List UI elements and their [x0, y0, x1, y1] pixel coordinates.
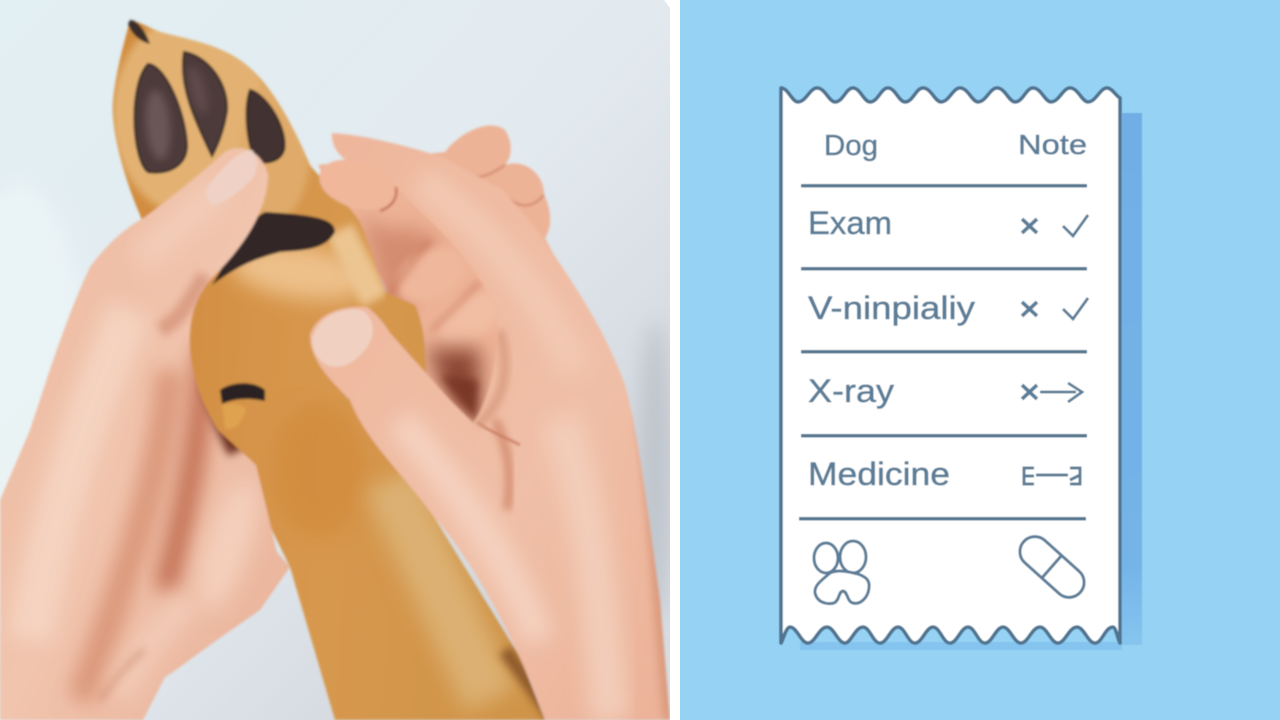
toe pad: middle [183, 52, 227, 156]
panel: blue background [680, 0, 1280, 720]
dog leg and paw [112, 15, 555, 720]
row: x-ray [808, 373, 1082, 409]
row: exam: Exam [808, 205, 892, 241]
row: medicine [808, 456, 1080, 492]
icon: pill [1014, 530, 1090, 604]
claw [128, 20, 150, 44]
column headers: Dog [824, 130, 878, 162]
row: exam [808, 205, 1088, 241]
toe pad: right [247, 90, 285, 162]
receipt [781, 88, 1120, 643]
row: x-ray: X-ray [808, 373, 894, 409]
receipt shadow [800, 113, 1142, 650]
main pad [212, 212, 335, 285]
back fingers of right hand [317, 124, 552, 424]
left hand [0, 148, 290, 720]
column headers [824, 129, 1087, 162]
right hand and thumb [310, 133, 670, 720]
panel: photo of hands holding dog paw [0, 0, 671, 720]
short middle finger [318, 158, 348, 207]
icon: paw outline [814, 541, 869, 604]
thumb nail [312, 309, 373, 367]
thumbnail [206, 150, 257, 205]
dewclaw [220, 383, 265, 429]
toe pad: left [134, 64, 187, 173]
column headers: Note [1018, 129, 1087, 160]
row: medicine: Medicine [808, 456, 950, 492]
row: v-ninpialiy [808, 290, 1088, 326]
row: v-ninpialiy: V-ninpialiy [808, 290, 975, 326]
